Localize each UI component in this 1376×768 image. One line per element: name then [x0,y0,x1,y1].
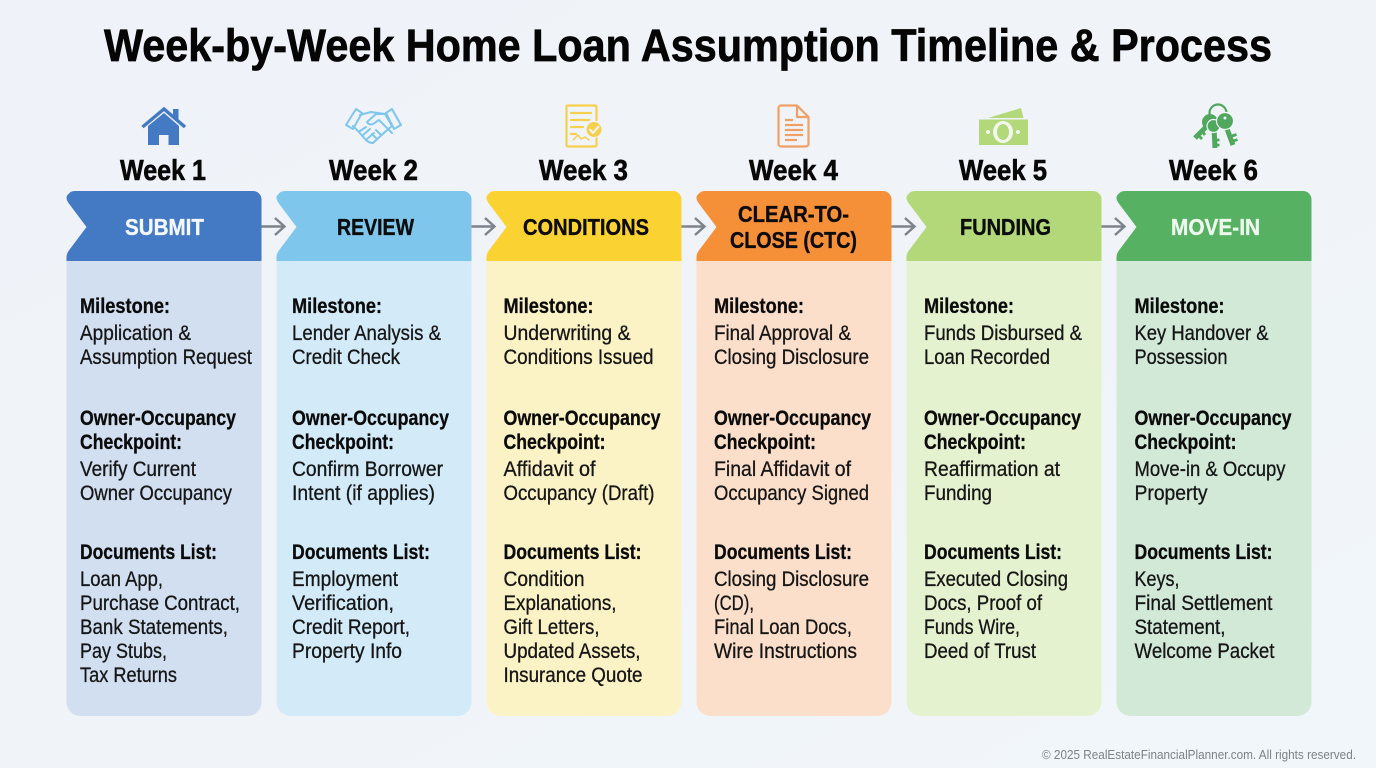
milestone: Milestone: [80,295,170,318]
owner-occupancy checkpoint: Affidavit of [504,458,596,481]
documents list: Closing Disclosure [714,568,869,591]
arrow: week 1 to week 2 [262,218,284,235]
milestone: Milestone: [714,295,804,318]
documents list: Funds Wire, [924,616,1020,639]
owner-occupancy checkpoint: Owner Occupancy [80,482,232,505]
documents list: Documents List: [714,541,852,564]
documents list: Insurance Quote [504,664,642,687]
icon: keys [1195,104,1238,148]
documents list: Documents List: [80,541,217,564]
body card [1116,255,1312,716]
arrow: week 4 to week 5 [892,218,914,235]
body card [906,255,1102,716]
owner-occupancy checkpoint [80,407,236,505]
header banner [1116,191,1312,261]
owner-occupancy checkpoint [504,407,661,505]
milestone: Conditions Issued [504,346,654,369]
documents list: Welcome Packet [1134,640,1275,663]
documents list: Property Info [292,640,402,663]
body card [276,255,472,716]
documents list: Documents List: [1134,541,1272,564]
documents list [1134,541,1275,663]
documents list [292,541,430,663]
milestone: Milestone: [292,295,382,318]
owner-occupancy checkpoint: Owner-Occupancy [714,407,871,430]
week label: Week 5 [959,155,1047,187]
arrow: week 5 to week 6 [1102,218,1124,235]
owner-occupancy checkpoint: Checkpoint: [292,431,394,454]
header text [730,201,857,253]
milestone: Funds Disbursed & [924,322,1082,345]
milestone: Possession [1134,346,1228,369]
owner-occupancy checkpoint: Intent (if applies) [292,482,435,505]
milestone [80,295,252,369]
owner-occupancy checkpoint [714,407,871,505]
owner-occupancy checkpoint: Checkpoint: [714,431,816,454]
milestone: Closing Disclosure [714,346,869,369]
documents list: Credit Report, [292,616,410,639]
header text: MOVE-IN [1171,214,1260,240]
milestone [504,295,654,369]
owner-occupancy checkpoint: Confirm Borrower [292,458,443,481]
milestone: Milestone: [924,295,1014,318]
documents list: Updated Assets, [504,640,640,663]
owner-occupancy checkpoint: Owner-Occupancy [504,407,661,430]
milestone: Underwriting & [504,322,630,345]
milestone: Credit Check [292,346,400,369]
milestone: Milestone: [504,295,594,318]
documents list: Condition [504,568,584,591]
panel: week 3 conditions [486,106,682,716]
documents list: Explanations, [504,592,616,615]
header text: REVIEW [337,214,414,240]
documents list: Documents List: [924,541,1062,564]
owner-occupancy checkpoint: Owner-Occupancy [924,407,1081,430]
owner-occupancy checkpoint: Final Affidavit of [714,458,851,481]
panel: week 5 funding [906,108,1102,716]
milestone: Lender Analysis & [292,322,441,345]
owner-occupancy checkpoint: Verify Current [80,458,196,481]
owner-occupancy checkpoint: Property [1134,482,1208,505]
week label: Week 3 [539,155,628,187]
documents list: Deed of Trust [924,640,1036,663]
milestone: Loan Recorded [924,346,1050,369]
documents list: Pay Stubs, [80,640,167,663]
documents list: Executed Closing [924,568,1068,591]
header banner [66,191,262,261]
arrow: week 2 to week 3 [472,218,494,235]
owner-occupancy checkpoint: Occupancy Signed [714,482,869,505]
milestone: Application & [80,322,191,345]
owner-occupancy checkpoint [924,407,1081,505]
owner-occupancy checkpoint [1134,407,1292,505]
documents list: Documents List: [292,541,430,564]
owner-occupancy checkpoint: Reaffirmation at [924,458,1060,481]
arrow: week 3 to week 4 [682,218,704,235]
milestone: Assumption Request [80,346,252,369]
week label: Week 1 [120,155,206,187]
documents list: Verification, [292,592,394,615]
documents list: Statement, [1134,616,1226,639]
icon: handshake [346,109,401,143]
documents list: Bank Statements, [80,616,228,639]
header banner [696,191,892,261]
header text: SUBMIT [125,214,204,240]
header banner [906,191,1102,261]
icon: house [142,109,185,145]
owner-occupancy checkpoint: Funding [924,482,992,505]
milestone [292,295,441,369]
owner-occupancy checkpoint: Checkpoint: [1134,431,1236,454]
owner-occupancy checkpoint: Move-in & Occupy [1134,458,1286,481]
milestone: Milestone: [1134,295,1224,318]
documents list: Purchase Contract, [80,592,240,615]
documents list: Tax Returns [80,664,177,687]
body card [696,255,892,716]
milestone [1134,295,1268,369]
icon: document [778,106,808,146]
owner-occupancy checkpoint: Checkpoint: [924,431,1026,454]
documents list: Wire Instructions [714,640,857,663]
milestone [714,295,869,369]
header banner [276,191,472,261]
documents list: Loan App, [80,568,163,591]
owner-occupancy checkpoint: Owner-Occupancy [292,407,449,430]
panel: week 1 submit [66,109,262,716]
owner-occupancy checkpoint: Checkpoint: [504,431,606,454]
header text: CLOSE (CTC) [730,227,857,253]
milestone: Key Handover & [1134,322,1268,345]
documents list: Employment [292,568,398,591]
week label: Week 2 [329,155,418,187]
header banner [486,191,682,261]
documents list [714,541,869,663]
documents list: Final Settlement [1134,592,1273,615]
panel: week 2 review [276,109,472,716]
body card [486,255,682,716]
milestone: Final Approval & [714,322,851,345]
owner-occupancy checkpoint: Checkpoint: [80,431,182,454]
panel: week 4 clear-to-close [696,106,892,716]
milestone [924,295,1082,369]
icon: signed document with check [566,106,602,146]
documents list: Gift Letters, [504,616,600,639]
documents list: (CD), [714,592,754,615]
owner-occupancy checkpoint: Owner-Occupancy [1134,407,1292,430]
header text: FUNDING [960,214,1051,240]
week label: Week 4 [749,155,838,187]
documents list [80,541,240,687]
header text: CONDITIONS [523,214,649,240]
body card [66,255,262,716]
panel: week 6 move-in [1116,104,1312,716]
title: Week-by-Week Home Loan Assumption Timeline & Process [104,20,1272,71]
header text: CLEAR-TO- [738,201,849,227]
icon: cash [979,108,1028,145]
documents list: Docs, Proof of [924,592,1042,615]
owner-occupancy checkpoint: Owner-Occupancy [80,407,236,430]
week label: Week 6 [1169,155,1258,187]
documents list: Documents List: [504,541,642,564]
owner-occupancy checkpoint: Occupancy (Draft) [504,482,654,505]
documents list [924,541,1068,663]
documents list: Keys, [1134,568,1180,591]
owner-occupancy checkpoint [292,407,449,505]
documents list: Final Loan Docs, [714,616,852,639]
documents list [504,541,642,687]
